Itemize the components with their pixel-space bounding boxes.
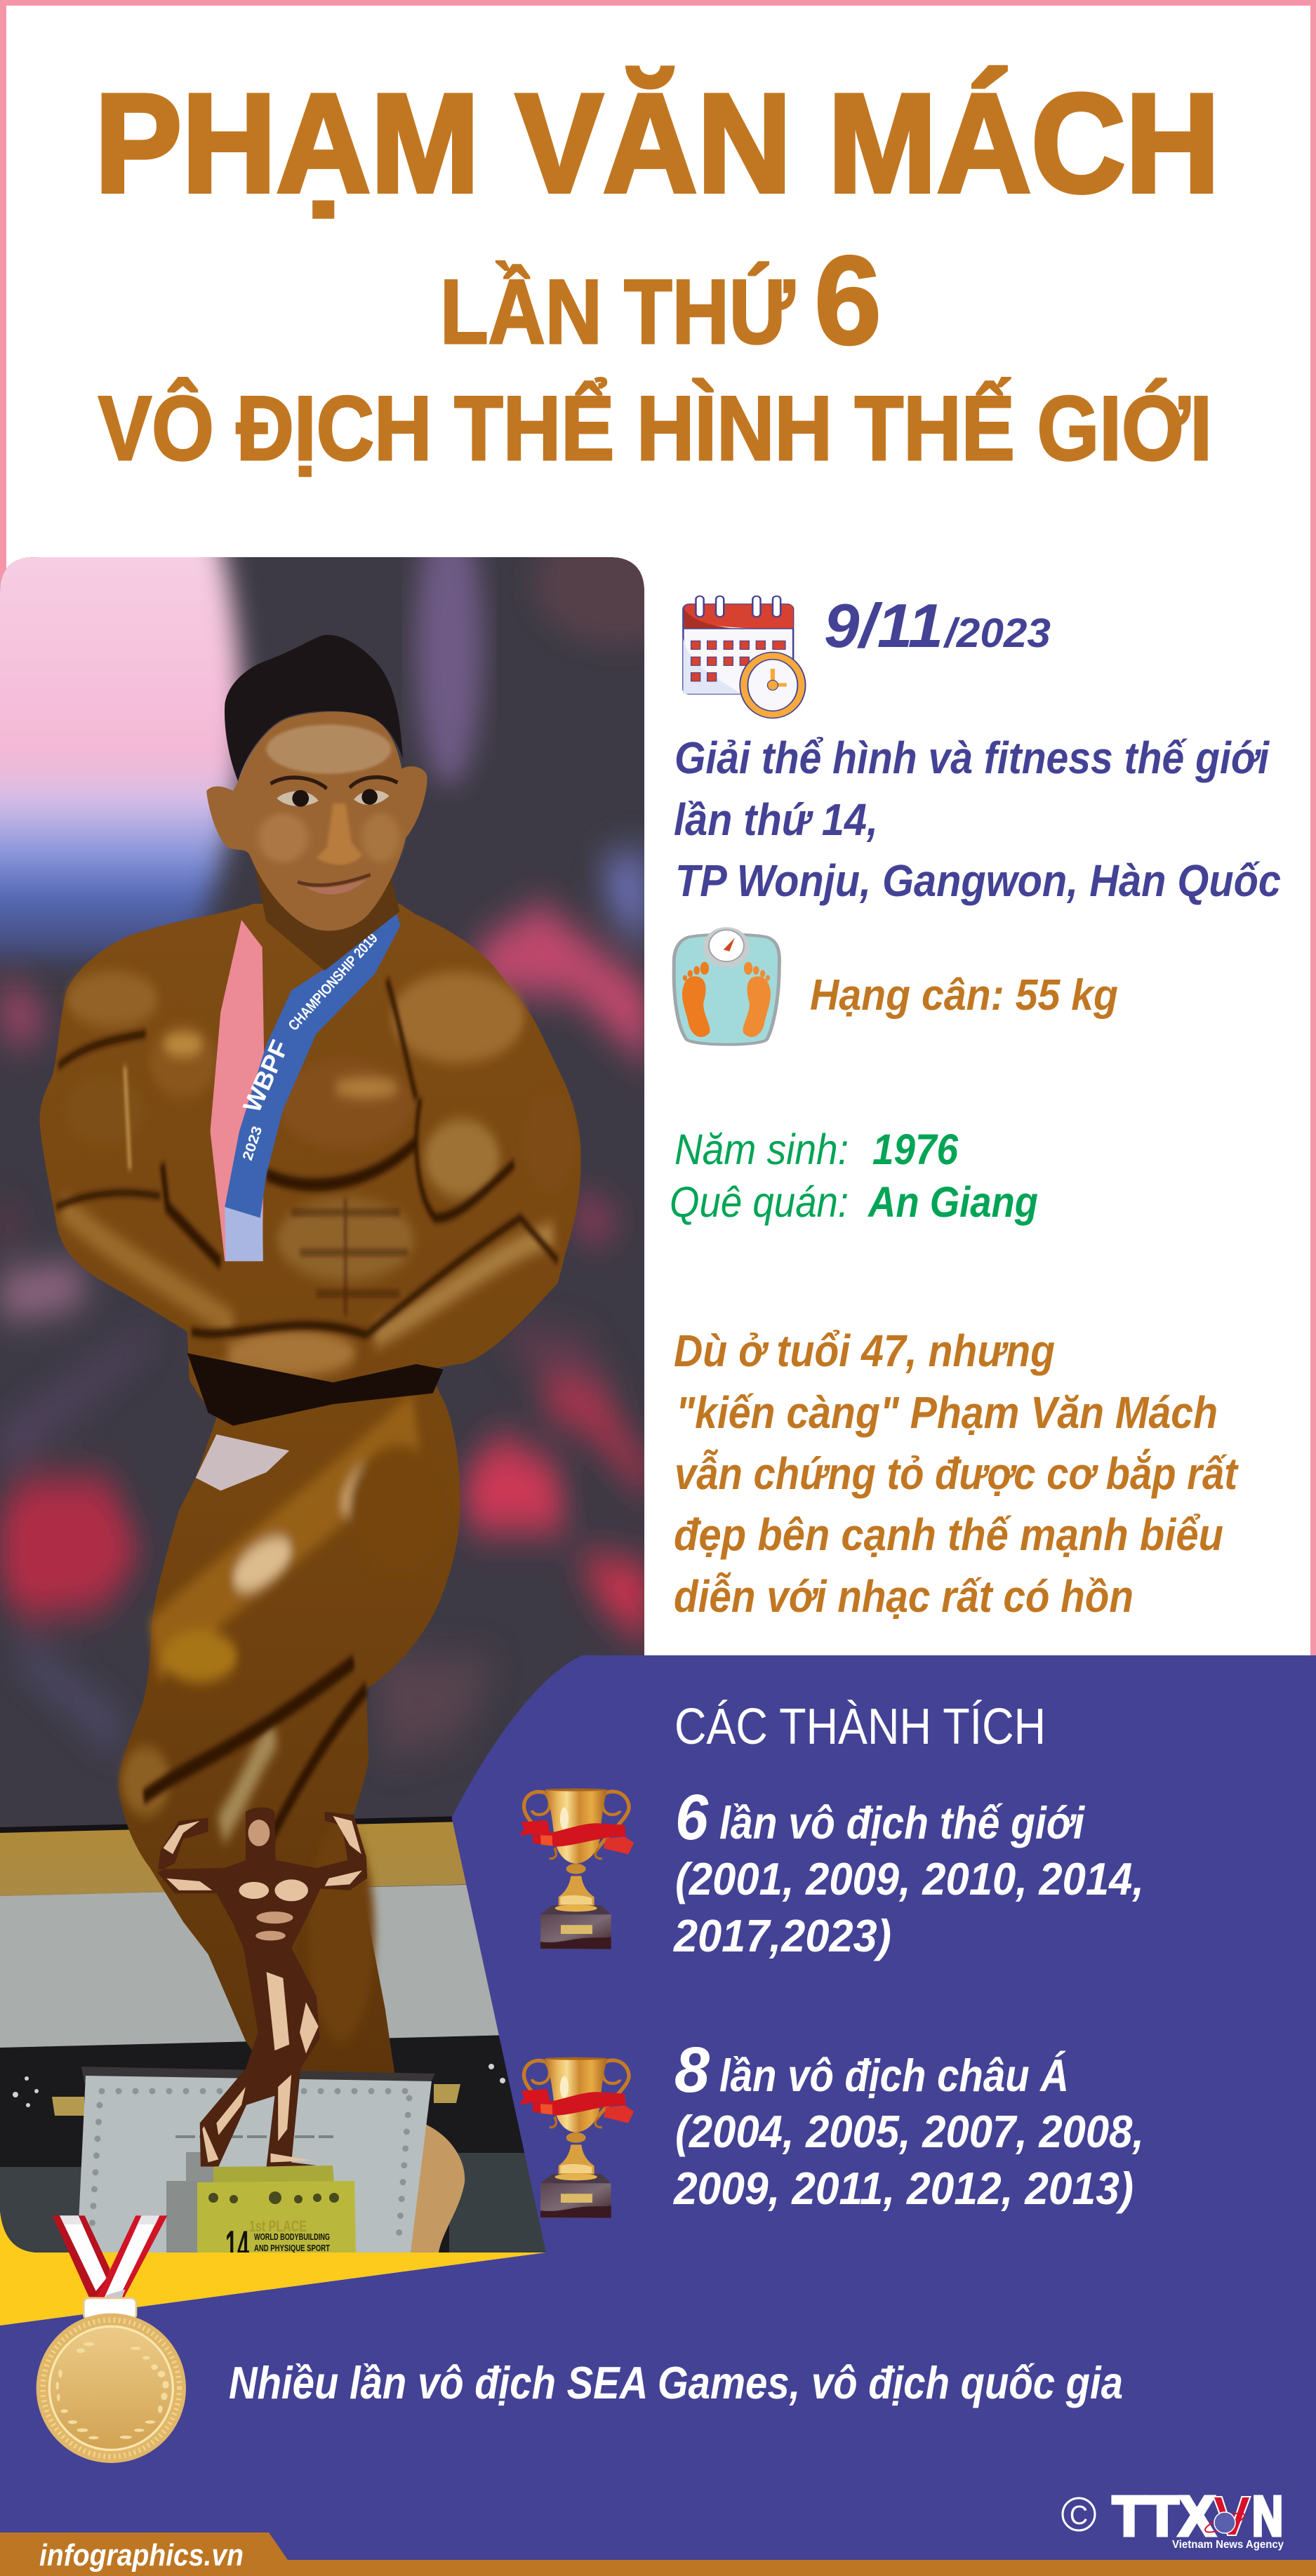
hometown: An Giang — [867, 1178, 1038, 1226]
ribbon text championship: CHAMPIONSHIP 2019 — [286, 930, 381, 1034]
title: line 2: LẦN THỨ — [440, 260, 795, 363]
paragraph line 1: Dù ở tuổi 47, nhưng — [674, 1326, 1055, 1376]
paragraph line 3: vẫn chứng tỏ được cơ bắp rất — [674, 1448, 1239, 1499]
trunks — [187, 1353, 444, 1426]
plaque text: WORLD BODYBUILDING — [254, 2231, 330, 2242]
face — [206, 712, 427, 930]
paragraph line 5: diễn với nhạc rất có hồn — [674, 1571, 1134, 1622]
athlete head — [206, 635, 427, 970]
athlete body silhouette — [40, 898, 581, 2078]
logo globe — [1203, 2509, 1247, 2536]
SEA Games line: Nhiều lần vô địch SEA Games, vô địch quốc gia — [229, 2357, 1123, 2408]
number 8: 8 — [674, 2034, 710, 2106]
birth year label: Năm sinh: — [674, 1126, 849, 1173]
asia titles years 2: 2009, 2011, 2012, 2013) — [672, 2163, 1134, 2214]
competitor number — [196, 1434, 289, 1490]
title: number 6: 6 — [814, 230, 882, 371]
equipment lights — [13, 2064, 505, 2107]
plaque caption: 1st PLACE — [249, 2217, 307, 2235]
neck — [254, 862, 399, 970]
pink medal ribbon — [211, 920, 265, 1261]
title: name: PHẠM VĂN MÁCH — [95, 65, 1220, 222]
icon: calendar with clock — [683, 596, 806, 718]
left eye — [271, 778, 327, 807]
title block — [95, 65, 1220, 479]
medal ribbons — [52, 2215, 167, 2302]
hometown label: Quê quán: — [670, 1178, 849, 1226]
ribbon text WBPF: WBPF — [237, 1036, 294, 1116]
plaque emblems — [208, 2191, 339, 2204]
yellow wedge — [0, 2196, 546, 2325]
cheek light — [258, 813, 308, 862]
icon: bathroom scale — [674, 927, 779, 1044]
logo letter N: N — [1252, 2485, 1283, 2547]
year: /2023 — [943, 610, 1051, 656]
gold tags — [52, 2084, 460, 2116]
trophy statuette behind certificate: 14 — [225, 2222, 249, 2271]
icon: gold medal — [36, 2215, 186, 2463]
forehead light — [267, 725, 392, 774]
ribbon text year: 2023 — [240, 1124, 265, 1163]
world titles years 2: 2017,2023) — [672, 1910, 891, 1961]
paragraph line 4: đẹp bên cạnh thế mạnh biểu — [674, 1509, 1223, 1560]
yellow plaque — [197, 2181, 356, 2253]
stage lights purple band — [416, 505, 483, 786]
grey panel — [0, 1884, 512, 2049]
stage lights top-left — [0, 519, 241, 968]
event line 2: lần thứ 14, — [674, 794, 878, 845]
weight class: Hạng cân: 55 kg — [810, 971, 1118, 1020]
birth year: 1976 — [872, 1126, 959, 1173]
stage lights maroon corner — [529, 557, 644, 650]
nose — [317, 803, 362, 865]
athlete's rear foot — [407, 2119, 465, 2253]
pink frame — [0, 0, 1316, 1655]
plaque top — [213, 2165, 334, 2184]
date: 9/11 — [824, 591, 943, 660]
mouth — [298, 874, 371, 895]
world titles years 1: (2001, 2009, 2010, 2014, — [675, 1853, 1144, 1904]
lavender ribbon end — [225, 1196, 263, 1261]
dark line above band — [0, 1816, 463, 1834]
hair — [225, 635, 403, 781]
muscle creases — [56, 980, 558, 1846]
bronze figurine — [157, 1807, 367, 2167]
black equipment band — [0, 2035, 561, 2253]
lower left strip — [0, 2167, 84, 2253]
world titles label: lần vô địch thế giới — [719, 1797, 1086, 1848]
number 6: 6 — [675, 1782, 709, 1853]
icon: trophy 2 — [519, 2057, 634, 2218]
muscle shading — [62, 971, 574, 2041]
right cheek — [362, 813, 399, 862]
asia titles — [672, 2034, 1144, 2214]
asia titles years 1: (2004, 2005, 2007, 2008, — [675, 2106, 1144, 2157]
description paragraph — [674, 1326, 1239, 1622]
plaque plinth — [186, 2152, 215, 2182]
icon: trophy 1 — [519, 1789, 634, 1949]
blue medal ribbon — [225, 898, 401, 1217]
logo letters TTX: TTX — [1112, 2485, 1215, 2547]
plaque side — [166, 2181, 199, 2253]
asia titles label: lần vô địch châu Á — [719, 2050, 1069, 2101]
birth info — [670, 1126, 1038, 1226]
logo letter V: V — [1213, 2485, 1251, 2547]
lower right strip — [449, 2153, 546, 2253]
right eye — [350, 778, 397, 805]
logo tagline: Vietnam News Agency — [1172, 2539, 1284, 2551]
photo background — [0, 557, 644, 2253]
footer site text: infographics.vn — [39, 2538, 244, 2572]
world titles — [672, 1782, 1144, 1961]
navy panel — [0, 1655, 1316, 2576]
blurred red streaks — [0, 850, 649, 1759]
trophy statuette behind certificate — [77, 1807, 435, 2271]
gold band — [0, 1822, 477, 1896]
logo: TTXVN — [1063, 2485, 1284, 2551]
copyright mark: C — [1070, 2501, 1088, 2530]
medal loop — [84, 2298, 136, 2319]
achievements heading: CÁC THÀNH TÍCH — [674, 1699, 1046, 1755]
footer band — [0, 2532, 1316, 2576]
certificate — [77, 2067, 435, 2253]
copyright mark — [1063, 2498, 1095, 2530]
paragraph line 2: "kiến càng" Phạm Văn Mách — [676, 1387, 1218, 1438]
event description — [674, 733, 1281, 906]
medal disc — [36, 2314, 186, 2463]
photo: athlete on stage — [0, 557, 644, 2253]
plaque text 2: AND PHYSIQUE SPORT — [254, 2243, 330, 2253]
